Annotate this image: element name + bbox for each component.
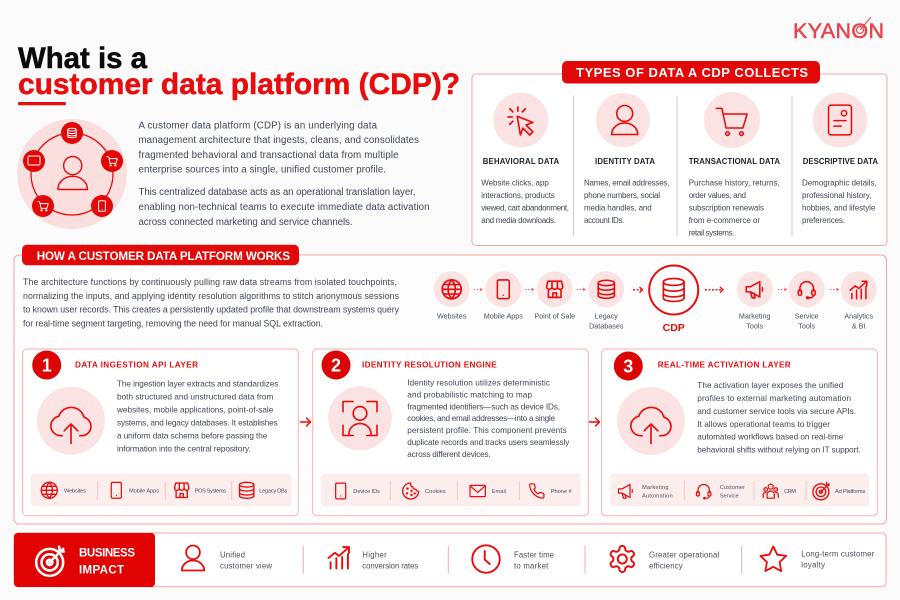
card 1 source strip: Websites	[64, 488, 86, 494]
card 1 source strip: POS Systems	[195, 488, 226, 494]
card 3 destination strip: Service	[720, 494, 739, 500]
flow: mobile apps	[484, 271, 523, 320]
arrow: card 2 to card 3	[590, 418, 600, 426]
card 2 text: fragmented identifiers—such as device IDs,	[407, 402, 560, 411]
architecture description: normalizing the inputs, and applying identity resolution algorithms to stitch anonymous sessions	[23, 291, 400, 301]
column: identity data: Names, email addresses,	[584, 178, 669, 188]
column: behavioral data: BEHAVIORAL DATA	[483, 157, 560, 166]
card 2 text: cookies, and email addresses—into a single	[407, 414, 555, 423]
column: transactional data: order values, and	[689, 191, 746, 200]
column: transactional data: TRANSACTIONAL DATA	[689, 157, 780, 166]
flow: legacy databases: Databases	[589, 321, 624, 330]
column: behavioral data: Website clicks, app	[481, 178, 549, 188]
column: descriptive data: professional history,	[802, 191, 871, 200]
flow: marketing tools: Marketing	[739, 311, 770, 320]
column: descriptive data	[802, 92, 878, 225]
heading pill: types of data: TYPES OF DATA A CDP COLLECTS	[576, 65, 808, 80]
heading pill: how it works: HOW A CUSTOMER DATA PLATFORM WORKS	[37, 250, 290, 263]
card 1 text: systems, and legacy databases. It establishes	[117, 418, 278, 427]
logo: Kyanon: KYANON	[793, 19, 884, 43]
card 2: identity resolution	[313, 349, 588, 516]
card 1: data ingestion: DATA INGESTION API LAYER	[75, 361, 198, 370]
column: behavioral data: interactions, products	[481, 191, 555, 200]
icon: customer	[58, 156, 88, 190]
number badge 3	[614, 352, 643, 380]
card 2 text: Identity resolution utilizes deterministic	[407, 378, 550, 387]
column: identity data: account IDs.	[584, 216, 624, 225]
card 3 destination strip: Automation	[642, 494, 673, 500]
card 3 text: It allows operational teams to trigger	[697, 420, 830, 429]
flow: legacy databases: Legacy	[595, 311, 618, 320]
number badge 3: 3	[623, 356, 633, 376]
flow: analytics and BI: & BI	[852, 321, 865, 330]
column: transactional data: Purchase history, returns,	[689, 178, 780, 188]
title: What is a	[18, 42, 147, 75]
card 2: identity resolution: IDENTITY RESOLUTION ENGINE	[362, 361, 497, 370]
architecture description	[23, 277, 400, 328]
panel: types of data	[472, 61, 887, 246]
panel: business impact	[14, 533, 886, 587]
column: descriptive data: Demographic details,	[802, 178, 877, 188]
flow: mobile apps: Mobile Apps	[484, 311, 523, 320]
intro text: across connected marketing and service channels.	[138, 217, 352, 228]
card 3 text: behavioral shifts without relying on IT support.	[697, 446, 861, 455]
card 3 destination strip: Ad Platforms	[835, 489, 865, 495]
flow: analytics and BI	[841, 271, 877, 330]
impact: operational efficiency: efficiency	[649, 561, 683, 570]
impact: conversion rates	[328, 547, 418, 570]
card 1 source strip	[31, 473, 292, 506]
card 1 source strip: Legacy DBs	[259, 488, 287, 494]
flow: point of sale: Point of Sale	[534, 311, 575, 320]
card 3: real-time activation: REAL-TIME ACTIVATION LAYER	[658, 361, 791, 370]
flow: service tools: Tools	[798, 321, 815, 330]
impact: customer loyalty: loyalty	[801, 560, 825, 569]
node: phone	[91, 195, 113, 217]
architecture description: for real-time segment targeting, removing the need for manual SQL extraction.	[23, 318, 323, 328]
intro text: This centralized database acts as an operational translation layer,	[138, 187, 416, 198]
flow: service tools: Service	[795, 311, 819, 320]
heading pill: types of data	[562, 61, 820, 84]
impact: faster time to market	[472, 545, 554, 573]
column: behavioral data: viewed, cart abandonment,	[481, 204, 569, 212]
heading pill: how it works	[22, 245, 299, 265]
intro text: management architecture that ingests, cleans, and consolidates	[138, 135, 419, 146]
column: descriptive data: DESCRIPTIVE DATA	[803, 157, 878, 166]
card 2 identifier strip: Cookies	[425, 489, 446, 495]
card 3: real-time activation	[602, 349, 877, 516]
card 3 text: The activation layer exposes the unified	[697, 381, 844, 390]
card 1 text: The ingestion layer extracts and standardizes	[117, 380, 278, 389]
flow: marketing tools	[737, 271, 773, 330]
impact: operational efficiency	[611, 546, 720, 572]
impact: faster time to market: Faster time	[514, 551, 554, 560]
column: transactional data	[689, 92, 780, 238]
number badge 2: 2	[331, 356, 341, 376]
flow: CDP hub	[649, 266, 698, 334]
flow: point of sale	[534, 271, 575, 320]
card 2 text: across different devices.	[407, 450, 491, 459]
card 3 text: automated workflows based on real-time	[697, 433, 844, 442]
impact: unified view: customer view	[220, 561, 272, 570]
column: transactional data: from e-commerce or	[689, 216, 760, 225]
impact: customer loyalty	[760, 546, 875, 571]
column: behavioral data: and media downloads.	[481, 216, 556, 225]
card 3 destination strip: Marketing	[642, 485, 668, 491]
flow: websites	[434, 271, 470, 320]
card 1 text: information into the central repository.	[117, 444, 251, 453]
card 2 identifier strip: Device IDs	[353, 489, 380, 495]
business impact badge: IMPACT	[79, 564, 124, 576]
flow: analytics and BI: Analytics	[844, 311, 873, 320]
impact: conversion rates: Higher	[362, 551, 387, 560]
card 3 text	[697, 381, 861, 455]
card 2 identifier strip	[321, 473, 581, 506]
panel: how a CDP works	[14, 245, 886, 524]
number badge 2	[322, 350, 350, 380]
column: behavioral data	[481, 92, 569, 225]
icon: cloud upload	[617, 387, 685, 455]
title	[18, 42, 460, 105]
icon: cloud upload	[37, 387, 105, 455]
column: identity data	[584, 93, 669, 225]
impact: customer loyalty: Long-term customer	[801, 550, 875, 559]
card 1: data ingestion	[23, 349, 298, 516]
flow: websites: Websites	[437, 311, 467, 320]
flow diagram	[434, 266, 877, 334]
node: cart	[101, 150, 123, 172]
architecture description: to known user records. This creates a persistently updated profile that downstream systems query	[23, 305, 400, 315]
flow: legacy databases	[588, 271, 624, 330]
column: transactional data: subscription renewals	[689, 204, 764, 212]
intro text: fragmented behavioral and transactional data from multiple	[138, 150, 398, 161]
impact: operational efficiency: Greater operational	[649, 551, 720, 560]
node: database	[61, 122, 83, 144]
number badge 1: 1	[42, 356, 52, 376]
business impact badge: BUSINESS	[79, 548, 135, 560]
impact: unified view: Unified	[220, 551, 245, 560]
number badge 1	[32, 350, 61, 380]
title: customer data platform (CDP)?	[18, 68, 460, 101]
card 1 text: websites, mobile applications, point-of-sale	[116, 405, 274, 414]
flow arrows	[474, 287, 838, 293]
card 2 identifier strip: Phone #	[551, 489, 573, 495]
card 3 text: and customer service tools via secure APIs.	[697, 407, 856, 416]
card 1 source strip: Mobile Apps	[129, 488, 159, 494]
card 2 text: persistent profile. This component prevents	[407, 426, 567, 435]
business impact badge	[14, 533, 155, 587]
impact: conversion rates: conversion rates	[362, 561, 418, 570]
column: descriptive data: preferences.	[802, 216, 845, 225]
card 2 text: duplicate records and tracks users seamlessly	[407, 438, 570, 447]
column: descriptive data: hobbies, and lifestyle	[802, 204, 876, 212]
architecture description: The architecture functions by continuously pulling raw data streams from isolated touchpoints,	[23, 277, 397, 287]
intro text: enterprise sources into a single, unified customer profile.	[138, 164, 386, 176]
card 3 destination strip: Customer	[720, 485, 745, 491]
impact: faster time to market: to market	[514, 561, 549, 570]
card 1 text: a uniform data schema before passing the	[117, 431, 268, 440]
column: identity data: IDENTITY DATA	[595, 157, 655, 166]
card 3 destination strip: CRM	[784, 489, 796, 495]
node: chat	[23, 150, 45, 172]
flow: CDP hub: CDP	[663, 322, 685, 334]
card 3 destination strip	[610, 473, 869, 506]
card 1 text	[116, 380, 278, 453]
intro text: A customer data platform (CDP) is an underlying data	[138, 120, 378, 132]
column: transactional data: retail systems.	[689, 228, 734, 238]
flow: service tools	[789, 271, 825, 330]
card 2 text	[407, 378, 570, 459]
node: shopping cart	[32, 195, 54, 217]
card 2 identifier strip: Email	[492, 489, 506, 495]
arrow: card 1 to card 2	[300, 418, 310, 426]
card 3 text: profiles to external marketing automation	[697, 394, 851, 403]
card 1 text: both structured and unstructured data from	[117, 393, 273, 402]
card 2 text: and probabilistic matching to map	[407, 390, 532, 399]
icon: face scan	[328, 386, 392, 450]
column: identity data: phone numbers, social	[584, 191, 660, 200]
hero illustration: customer surrounded by data sources	[17, 119, 127, 229]
column: identity data: media handles, and	[584, 204, 652, 212]
flow: marketing tools: Tools	[746, 321, 763, 330]
impact: unified view	[182, 546, 272, 570]
intro text	[138, 120, 430, 228]
intro text: enabling non-technical teams to execute immediate data activation	[138, 202, 430, 213]
